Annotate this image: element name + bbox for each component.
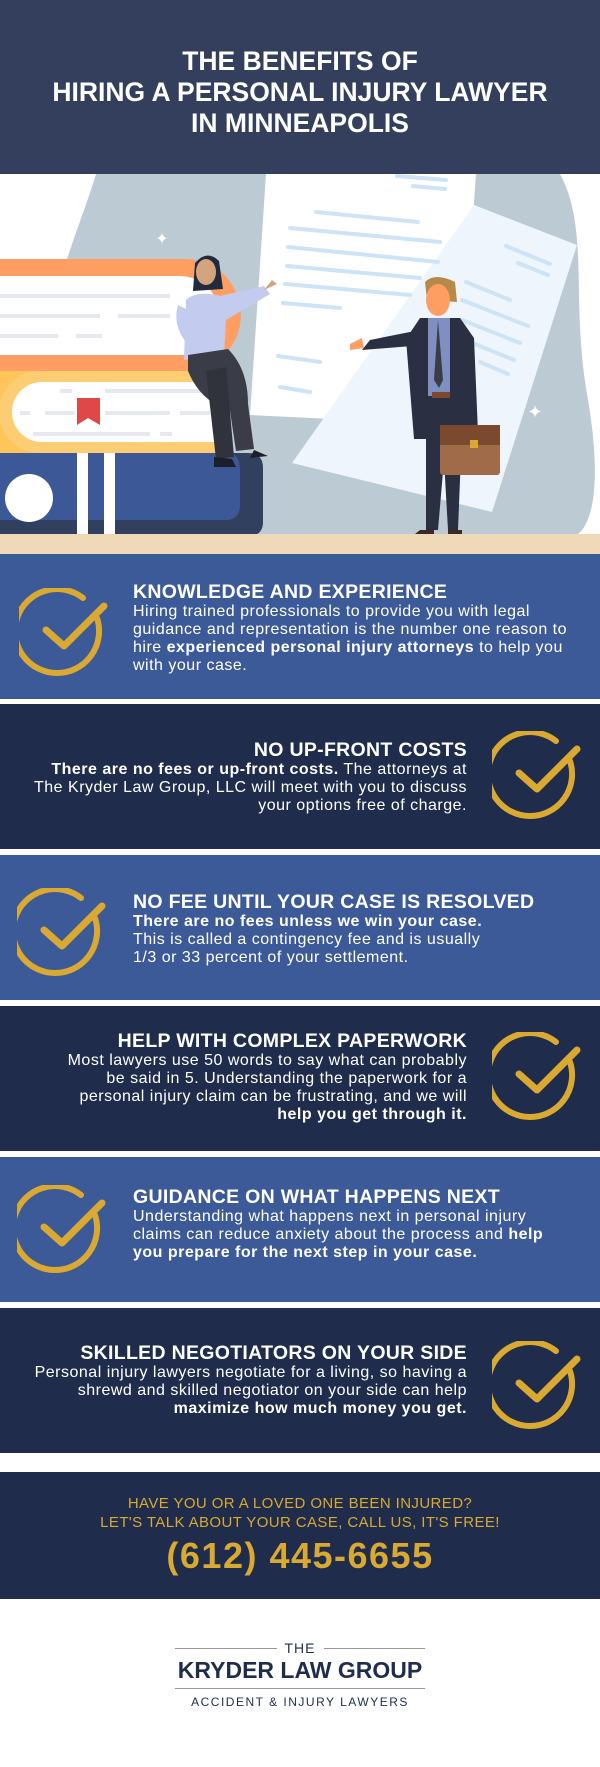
- text: no up-front: [34, 739, 467, 814]
- panel: complex paperwork: [0, 1006, 600, 1151]
- text: no fee: [133, 891, 534, 966]
- logo: [175, 1640, 425, 1709]
- cta text: LET'S TALK ABOUT YOUR CASE, CALL US, IT'S FREE!: [100, 1514, 500, 1531]
- text: knowledge: hire experienced personal injury attorneys to help you: [133, 639, 563, 656]
- text: no fee: This is called a contingency fee and is usually: [133, 931, 480, 948]
- text: no up-front: your options free of charge.: [258, 797, 467, 814]
- panel: no up-front costs: [0, 704, 600, 849]
- cta text: [100, 1495, 500, 1531]
- panel: knowledge and experience: [0, 554, 600, 699]
- text: guidance: [133, 1186, 543, 1261]
- text: no up-front: The Kryder Law Group, LLC will meet with you to discuss: [34, 779, 467, 796]
- icon: check circle: [492, 731, 580, 819]
- text: no fee: There are no fees unless we win your case.: [133, 913, 482, 930]
- text: paperwork: Most lawyers use 50 words to say what can probably: [68, 1052, 467, 1069]
- illustration: lawyers with books and documents: ✦: [527, 402, 543, 422]
- text: no up-front: There are no fees or up-front costs. The attorneys at: [51, 761, 467, 778]
- text: knowledge: with your case.: [133, 657, 247, 674]
- text: guidance: Understanding what happens next in personal injury: [133, 1208, 526, 1225]
- panel: skilled negotiators: [0, 1308, 600, 1453]
- text: knowledge: [133, 581, 567, 674]
- phone number: (612) 445-6655: [166, 1535, 434, 1576]
- icon: check circle: [492, 1032, 580, 1120]
- title: [0, 0, 600, 174]
- text: negotiators: SKILLED NEGOTIATORS ON YOUR SIDE: [80, 1342, 467, 1364]
- text: knowledge: KNOWLEDGE AND EXPERIENCE: [133, 581, 447, 603]
- title: THE BENEFITS OF: [182, 46, 418, 76]
- panel: guidance on what happens next: [0, 1157, 600, 1302]
- text: negotiators: maximize how much money you get.: [174, 1400, 467, 1417]
- text: knowledge: guidance and representation is the number one reason to: [133, 621, 567, 638]
- text: paperwork: help you get through it.: [277, 1106, 467, 1123]
- icon: check circle: [492, 1341, 580, 1429]
- icon: check circle: [17, 1185, 106, 1273]
- logo: KRYDER LAW GROUP: [178, 1657, 422, 1683]
- text: paperwork: personal injury claim can be frustrating, and we will: [79, 1088, 467, 1105]
- text: knowledge: Hiring trained professionals to provide you with legal: [133, 603, 530, 620]
- text: negotiators: shrewd and skilled negotiator on your side can help: [78, 1382, 467, 1399]
- cta text: HAVE YOU OR A LOVED ONE BEEN INJURED?: [128, 1495, 472, 1512]
- text: negotiators: [35, 1342, 467, 1417]
- text: negotiators: Personal injury lawyers negotiate for a living, so having a: [35, 1364, 467, 1381]
- text: guidance: claims can reduce anxiety about the process and help: [133, 1226, 543, 1243]
- text: paperwork: HELP WITH COMPLEX PAPERWORK: [118, 1030, 467, 1052]
- illustration: lawyers with books and documents: ✦: [155, 231, 169, 248]
- text: paperwork: [68, 1030, 467, 1123]
- title: HIRING A PERSONAL INJURY LAWYER: [52, 77, 548, 107]
- call to action: [0, 1472, 600, 1599]
- text: guidance: GUIDANCE ON WHAT HAPPENS NEXT: [133, 1186, 500, 1208]
- logo: THE: [284, 1640, 316, 1656]
- text: guidance: you prepare for the next step in your case.: [133, 1244, 477, 1261]
- icon: check circle: [17, 888, 106, 976]
- panel: no fee until resolved: [0, 855, 600, 1000]
- text: no fee: 1/3 or 33 percent of your settlement.: [133, 949, 409, 966]
- text: paperwork: be said in 5. Understanding the paperwork for a: [106, 1070, 467, 1087]
- text: no up-front: NO UP-FRONT COSTS: [254, 739, 467, 761]
- icon: check circle: [19, 588, 108, 676]
- text: no fee: NO FEE UNTIL YOUR CASE IS RESOLVED: [133, 891, 534, 913]
- illustration: lawyers with books and documents: [0, 174, 600, 554]
- title: IN MINNEAPOLIS: [191, 108, 409, 138]
- logo: ACCIDENT & INJURY LAWYERS: [191, 1695, 409, 1709]
